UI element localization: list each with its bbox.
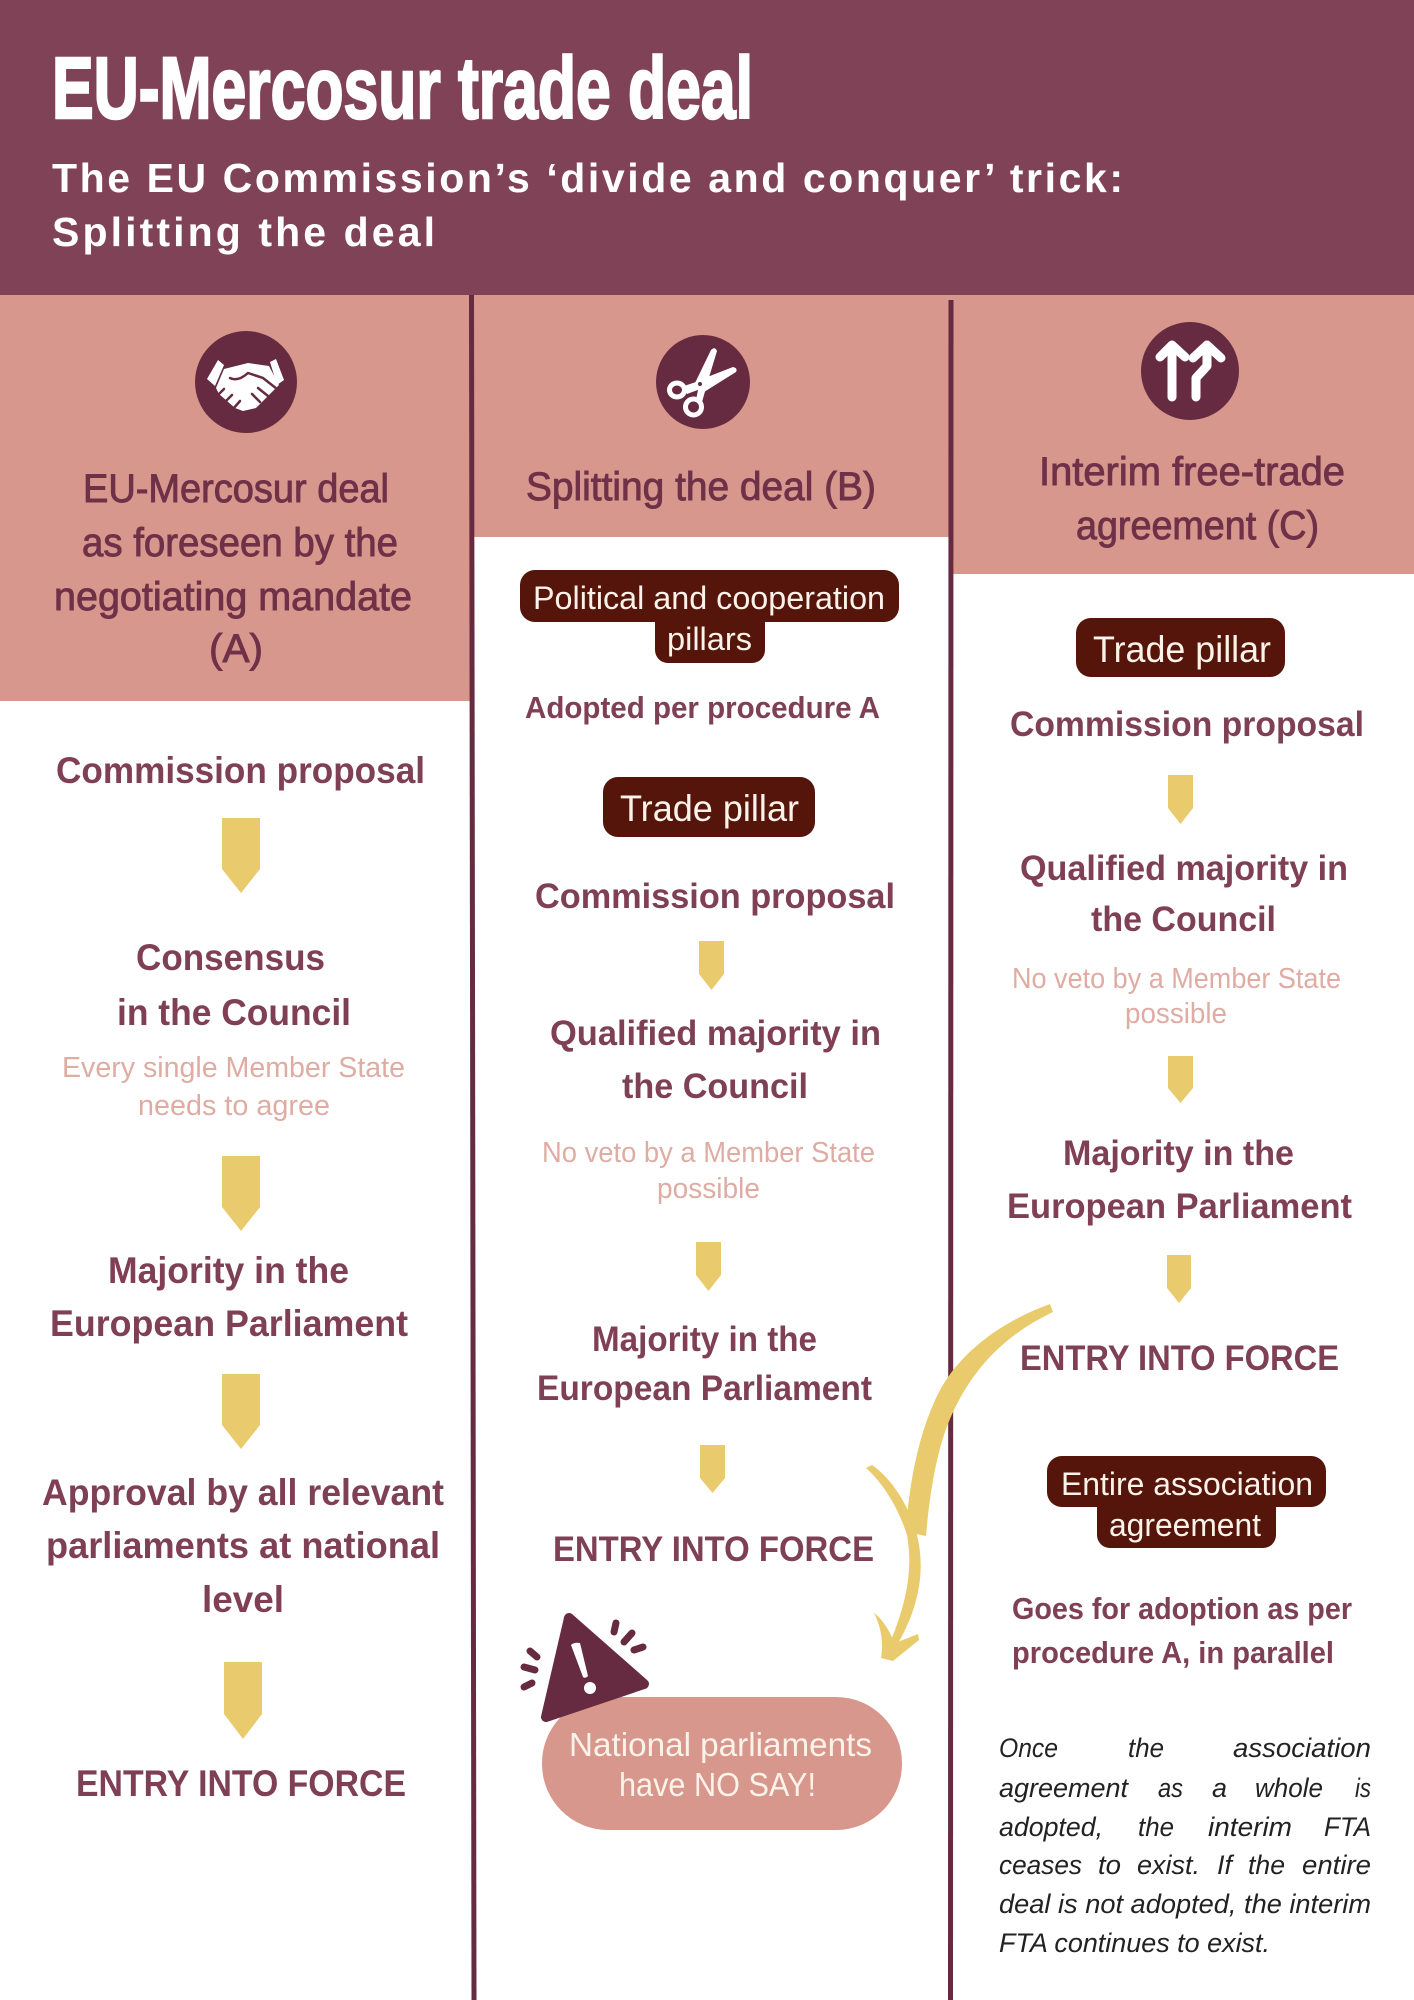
- pill: trade pillar: Trade pillar: [1093, 629, 1271, 670]
- text block: association agreement explanation: Once: [999, 1733, 1058, 1763]
- note: no veto: possible: [657, 1173, 760, 1205]
- pill: trade pillar: [1076, 618, 1285, 677]
- step: national parliaments: level: [202, 1579, 284, 1620]
- arrow: [700, 1445, 725, 1493]
- step: commission proposal: Commission proposal: [56, 750, 425, 791]
- icon: two arrows: [1141, 322, 1239, 420]
- text block: association agreement explanation: [999, 1733, 1371, 1958]
- column C heading: Interim free-trade: [1039, 450, 1345, 494]
- note: adopted per procedure A: Adopted per procedure A: [525, 690, 880, 725]
- callout: national parliaments have no say: National parliaments: [569, 1726, 872, 1763]
- step: majority in parliament: European Parliament: [50, 1303, 408, 1344]
- arrow: [1168, 775, 1193, 824]
- step: majority in parliament: [50, 1250, 408, 1344]
- arrow: [1168, 1056, 1193, 1103]
- note: no veto: possible: [1125, 998, 1227, 1030]
- step: entry into force: ENTRY INTO FORCE: [553, 1530, 874, 1569]
- arrow: curved yellow arrow from interim FTA to national parliaments: [866, 1304, 1053, 1661]
- callout: national parliaments have no say: have NO SAY!: [619, 1766, 816, 1803]
- step: qualified majority: the Council: [1091, 900, 1276, 939]
- callout: national parliaments have no say: [542, 1697, 902, 1830]
- note: every member state: [62, 1052, 405, 1122]
- step: majority in parliament: Majority in the: [108, 1250, 349, 1291]
- step: consensus in the Council: Consensus: [136, 937, 325, 978]
- text block: association agreement explanation: deal is not adopted, the interim: [999, 1889, 1371, 1919]
- step: majority in parliament: [537, 1320, 872, 1408]
- step: qualified majority: [550, 1014, 881, 1106]
- step: qualified majority: [1020, 849, 1348, 939]
- text block: association agreement explanation: interim: [1208, 1812, 1292, 1842]
- note: goes for adoption: [1012, 1591, 1352, 1670]
- note: every member state: needs to agree: [138, 1090, 330, 1122]
- header banner: [0, 0, 1414, 295]
- column B heading: Splitting the deal (B): [526, 465, 876, 509]
- pill: entire association agreement: [1047, 1456, 1326, 1548]
- note: goes for adoption: Goes for adoption as per: [1012, 1591, 1352, 1626]
- panel: column B, splitting the deal: [470, 295, 952, 1830]
- step: majority in parliament: European Parliament: [1007, 1187, 1352, 1226]
- step: entry into force: ENTRY INTO FORCE: [76, 1763, 406, 1804]
- text block: association agreement explanation: the: [1128, 1733, 1164, 1763]
- column A heading: as foreseen by the: [82, 521, 398, 565]
- step: majority in parliament: European Parliament: [537, 1369, 872, 1408]
- arrow: [222, 1156, 260, 1231]
- step: national parliaments: Approval by all relevant: [42, 1472, 444, 1513]
- note: no veto: No veto by a Member State: [1012, 963, 1341, 995]
- arrow: [222, 818, 260, 893]
- column C heading: agreement (C): [1076, 504, 1319, 548]
- panel: column C, interim free-trade agreement: [950, 295, 1414, 1958]
- note: no veto: [1012, 963, 1341, 1030]
- icon: handshake: [195, 331, 297, 433]
- step: qualified majority: the Council: [622, 1067, 808, 1106]
- step: qualified majority: Qualified majority in: [1020, 849, 1348, 888]
- text block: association agreement explanation: the: [1248, 1850, 1285, 1880]
- step: qualified majority: Qualified majority in: [550, 1014, 881, 1053]
- column dividers: [469, 295, 954, 2000]
- subtitle: The EU Commission’s ‘divide and conquer’ trick:: [52, 155, 1123, 201]
- pill: entire association agreement: agreement: [1109, 1507, 1261, 1543]
- step: majority in parliament: Majority in the: [1063, 1134, 1294, 1173]
- step: national parliaments: parliaments at national: [46, 1525, 440, 1566]
- note: every member state: Every single Member State: [62, 1052, 405, 1084]
- column A heading: negotiating mandate: [54, 575, 412, 619]
- arrow: [699, 941, 724, 990]
- step: commission proposal: Commission proposal: [1010, 705, 1364, 744]
- column A heading: EU-Mercosur deal: [83, 467, 389, 511]
- pill: political and cooperation pillars: [520, 570, 899, 663]
- arrow: [224, 1662, 262, 1739]
- text block: association agreement explanation: association: [1233, 1733, 1371, 1763]
- arrow: [1167, 1255, 1191, 1303]
- text block: association agreement explanation: ceases: [999, 1850, 1082, 1880]
- pill: political and cooperation pillars: pillars: [667, 621, 752, 657]
- text block: association agreement explanation: to: [1098, 1850, 1121, 1880]
- pill: trade pillar: [603, 777, 815, 837]
- arrow: [696, 1242, 721, 1291]
- column A heading: (A): [209, 627, 263, 671]
- pill: trade pillar: Trade pillar: [620, 788, 799, 829]
- panel: column A, full procedure: [0, 295, 470, 1804]
- text block: association agreement explanation: agreement: [999, 1773, 1129, 1803]
- note: no veto: [542, 1137, 875, 1205]
- title: EU-Mercosur trade deal: [52, 40, 753, 137]
- step: entry into force: ENTRY INTO FORCE: [1020, 1339, 1339, 1378]
- text block: association agreement explanation: as: [1158, 1773, 1183, 1803]
- icon: scissors: [656, 335, 750, 429]
- text block: association agreement explanation: entire: [1302, 1850, 1371, 1880]
- step: consensus in the Council: [117, 937, 351, 1033]
- column A heading: [54, 467, 412, 671]
- text block: association agreement explanation: exist.: [1137, 1850, 1200, 1880]
- step: majority in parliament: [1007, 1134, 1352, 1226]
- pill: political and cooperation pillars: Political and cooperation: [533, 580, 885, 616]
- step: commission proposal: Commission proposal: [535, 877, 895, 916]
- step: consensus in the Council: in the Council: [117, 992, 351, 1033]
- note: goes for adoption: procedure A, in parallel: [1012, 1635, 1334, 1670]
- text block: association agreement explanation: a: [1212, 1773, 1227, 1803]
- text block: association agreement explanation: whole: [1255, 1773, 1323, 1803]
- text block: association agreement explanation: is: [1355, 1773, 1371, 1803]
- text block: association agreement explanation: If: [1217, 1850, 1234, 1880]
- arrow: [222, 1374, 260, 1449]
- pill: entire association agreement: Entire association: [1061, 1466, 1313, 1502]
- text block: association agreement explanation: FTA: [1324, 1812, 1371, 1842]
- step: national parliaments: [42, 1472, 444, 1620]
- text block: association agreement explanation: FTA continues to exist.: [999, 1928, 1270, 1958]
- step: majority in parliament: Majority in the: [592, 1320, 817, 1359]
- subtitle: Splitting the deal: [52, 209, 435, 255]
- text block: association agreement explanation: the: [1138, 1812, 1174, 1842]
- icon: warning triangle: [524, 1618, 644, 1717]
- note: no veto: No veto by a Member State: [542, 1137, 875, 1169]
- text block: association agreement explanation: adopted,: [999, 1812, 1103, 1842]
- subtitle: [52, 155, 1123, 255]
- column C heading: [1039, 450, 1345, 548]
